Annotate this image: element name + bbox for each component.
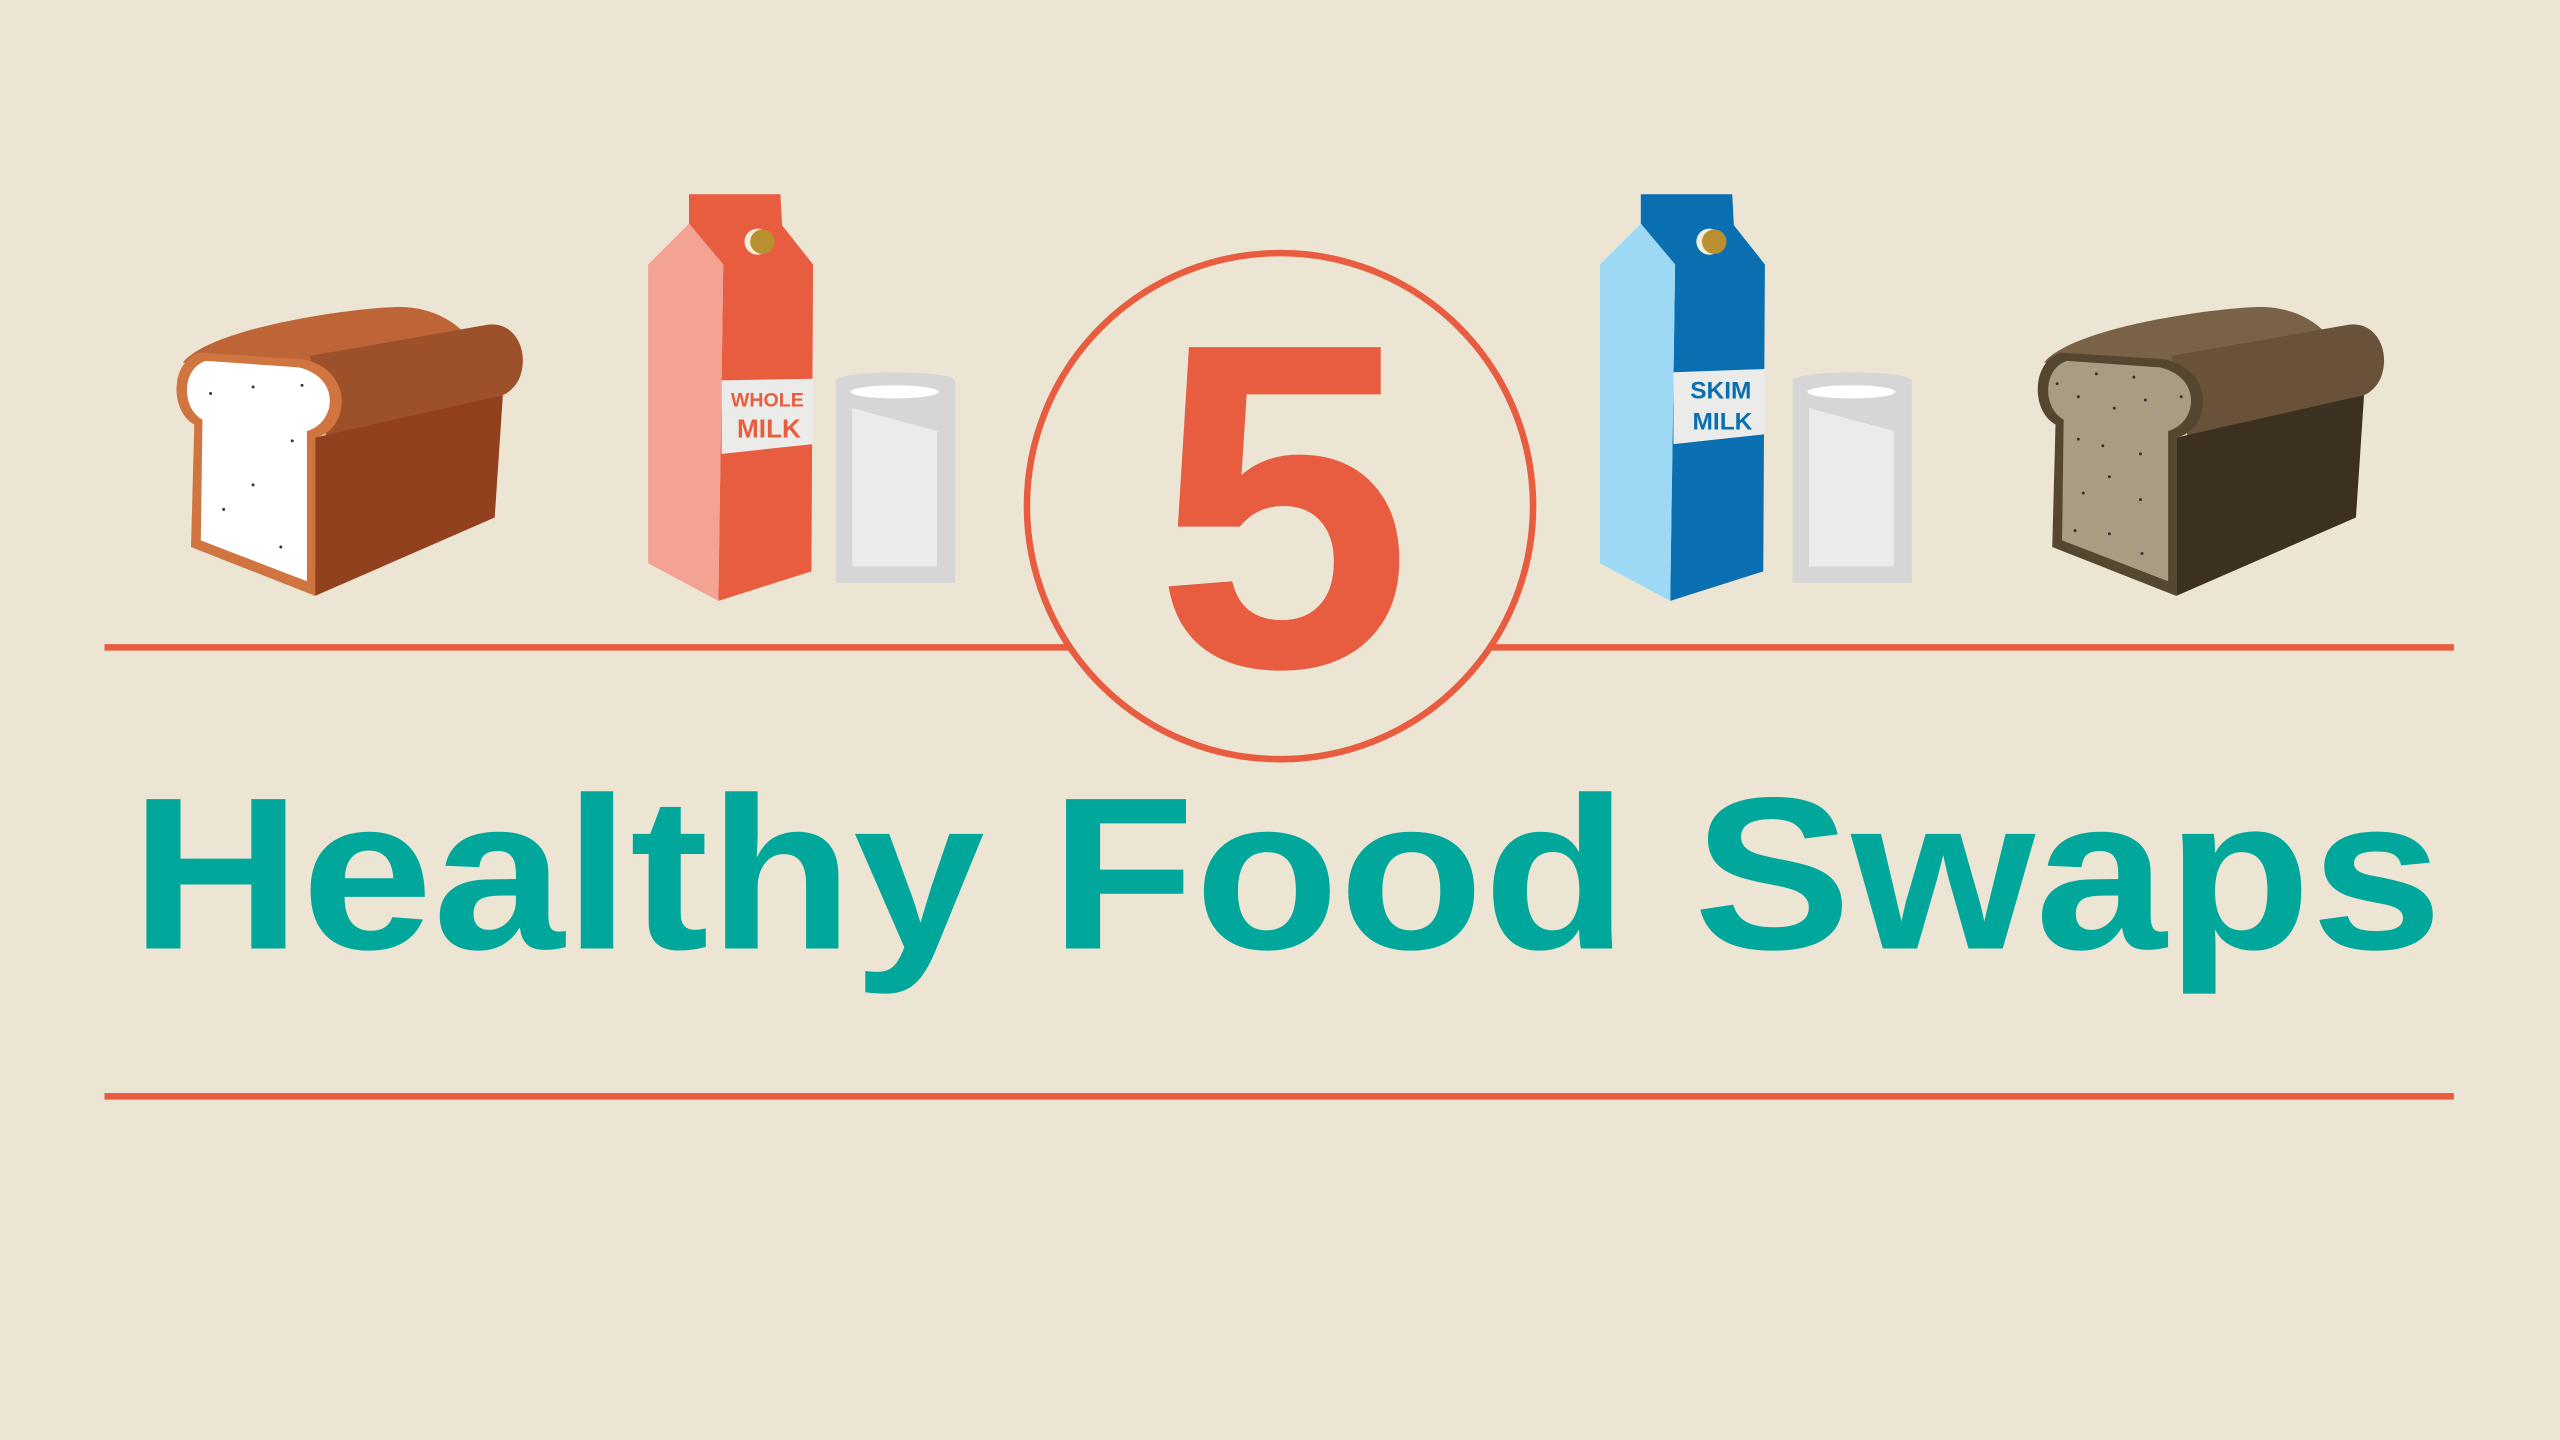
badge: number 5 in circle [1027, 247, 1533, 765]
icon: milk glass right [1793, 372, 1912, 583]
title: Healthy Food Swaps [131, 753, 2442, 996]
icon: white bread loaf [176, 307, 523, 596]
icon: whole milk carton [648, 194, 813, 601]
label text: SKIM MILK: MILK [1693, 408, 1753, 435]
divider lines [104, 647, 2454, 1096]
icon: skim milk carton [1600, 194, 1765, 601]
icon: whole wheat bread loaf [2038, 307, 2384, 596]
icon: milk glass left [836, 372, 955, 583]
label text: WHOLE MILK: MILK [737, 414, 801, 444]
label text: WHOLE MILK: WHOLE [731, 390, 804, 412]
label text: WHOLE MILK [731, 390, 804, 444]
label text: SKIM MILK [1690, 377, 1753, 435]
label text: SKIM MILK: SKIM [1690, 377, 1751, 404]
badge: number 5 in circle: 5 [1154, 247, 1412, 765]
